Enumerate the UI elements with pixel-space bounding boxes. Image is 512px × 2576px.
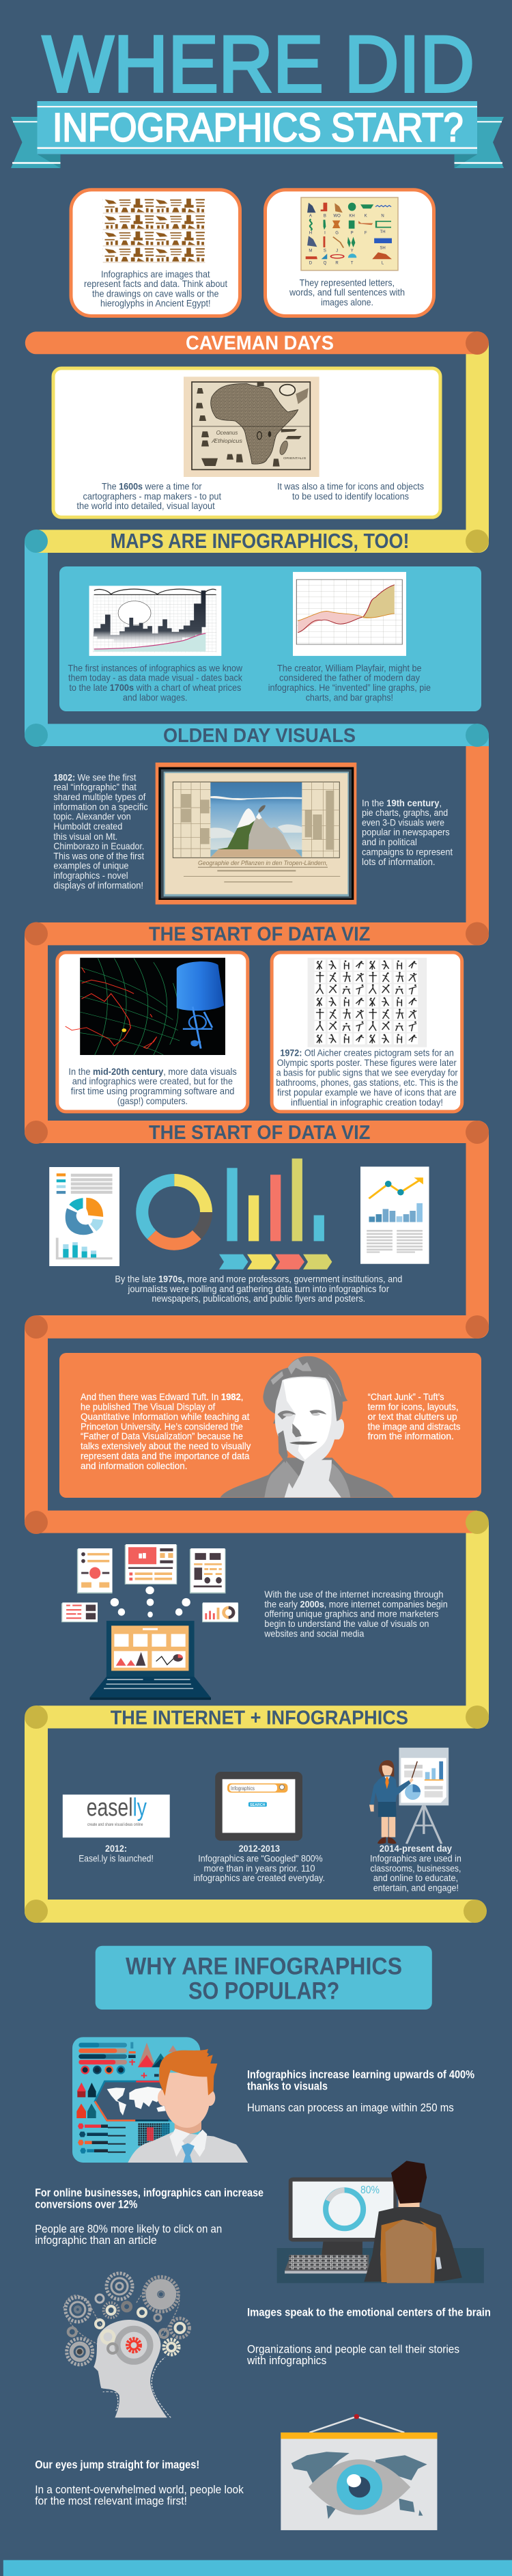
text: 2012 launch: Easel.ly is launched!: [79, 1853, 154, 1864]
text: 1802 humboldt: real “infographic” that: [53, 781, 137, 792]
image: alphabet chart: F: [365, 231, 367, 235]
text: 1972 olympic: 1972: Otl Aicher creates pictogram sets for an: [280, 1047, 454, 1058]
text: emotional centers: Organizations and people can tell their stories: [247, 2343, 459, 2355]
image: alphabet chart: P: [351, 231, 354, 235]
image: hieroglyph frieze: [103, 197, 205, 264]
image: alphabet chart: M: [309, 249, 312, 253]
text: 1802 humboldt: Chimborazo in Ecuador.: [53, 840, 144, 851]
title: where did: WHERE DID: [42, 19, 474, 109]
heading: the start of data viz: THE START OF DATA VIZ: [149, 924, 370, 946]
text: tuft biography: Princeton University. He’s considered the: [81, 1421, 243, 1431]
text: chart junk: term for icons, layouts,: [368, 1401, 459, 1412]
text: 1600s cartographers: The 1600s were a time for: [102, 481, 202, 492]
logo card: easelly: [63, 1794, 170, 1837]
icon: chevron arrows: [219, 1255, 332, 1270]
illustration: portrait of tufte: [221, 1356, 394, 1498]
chart: playfair trade balance: [293, 572, 406, 656]
text: eyes jump: In a content-overwhelmed world, people look: [35, 2484, 244, 2496]
text: 2012 launch: 2012:: [105, 1843, 127, 1854]
text: 2014-present: [370, 1843, 461, 1893]
image: computer graphic globe: [66, 958, 225, 1055]
text: tuft biography: talks extensively about the need to visually: [81, 1440, 251, 1451]
logo card: easelly: create and share visual ideas online: [87, 1822, 143, 1827]
text: tuft biography: he published The Visual Display of: [81, 1401, 215, 1412]
text: icons and objects: [277, 481, 424, 502]
text: 1802 humboldt: information on a specific: [53, 801, 148, 812]
image: alphabet chart: WO: [333, 214, 341, 218]
text: 1802 humboldt: topic. Alexander von: [53, 811, 131, 822]
heading: the start of data viz 2: THE START OF DATA VIZ: [149, 1122, 370, 1144]
text: first instances: and labor wages.: [123, 692, 187, 703]
image: map of africa: Æthiopicus: [211, 437, 243, 444]
image: alphabet chart: TH: [380, 230, 386, 234]
text: 2012 launch: [79, 1843, 154, 1864]
text: william playfair: [268, 663, 431, 703]
text: chart junk: “Chart Junk” - Tuft’s: [368, 1391, 444, 1402]
illustration: poster with eye and world map: [281, 2414, 437, 2530]
image: alphabet chart: [301, 197, 398, 271]
text: 1972 olympic: a basis for public signs that we see everyday for: [276, 1067, 458, 1078]
text: chart junk: or text that clutters up: [368, 1411, 457, 1422]
text: tuft biography: represent data and the importance of data: [81, 1451, 250, 1462]
text: first instances: to the late 1700s with a chart of wheat prices: [69, 682, 241, 693]
text: late 1970s: [115, 1274, 402, 1304]
text: late 1970s: newspapers, publications, and public flyers and posters.: [152, 1293, 365, 1304]
text: increase learning: thanks to visuals: [247, 2080, 328, 2092]
illustration: man at monitor with 80% chart: 80%: [360, 2184, 380, 2196]
illustration: presenter with easel: [369, 1748, 449, 1844]
document icon: line chart report: [360, 1166, 429, 1264]
icon: tablet with search: SEARCH: [250, 1803, 266, 1807]
text: online conversions: People are 80% more likely to click on an: [35, 2223, 222, 2235]
text: 1600s cartographers: the world into detailed, visual layout: [76, 500, 215, 511]
text: 2014-present: classrooms, businesses,: [370, 1863, 461, 1874]
footer bar: [3, 2560, 512, 2576]
text: emotional centers: [246, 2306, 491, 2367]
text: first instances: The first instances of infographics as we know: [68, 663, 243, 674]
text: tuft biography: Quantitative Information while teaching at: [81, 1411, 250, 1422]
image: olympic pictogram grid: [308, 958, 427, 1047]
heading: the internet + infographics: THE INTERNET + INFOGRAPHICS: [111, 1707, 408, 1729]
text: 19th century: lots of information.: [362, 856, 436, 867]
chart: donut ring: [142, 1180, 206, 1244]
text: early 2000s: offering unique graphics and more marketers: [264, 1608, 438, 1619]
text: 1972 olympic: Olympic sports poster. These figures were later: [277, 1057, 457, 1068]
text: 2012-2013: more than in years prior. 110: [203, 1863, 315, 1874]
panel: why are infographics so popular: WHY ARE INFOGRAPHICS: [126, 1953, 402, 1979]
text: mid-20th century: (gasp!) computers.: [117, 1095, 188, 1106]
text: card description: hieroglyphs in Ancient Egypt!: [100, 298, 210, 309]
text: chart junk: from the information.: [368, 1431, 454, 1442]
chart: colored bars: [227, 1159, 324, 1241]
image: alphabet chart: N: [381, 214, 384, 218]
image: alphabet chart: I: [324, 231, 326, 235]
text: card description: They represented letters,: [300, 277, 395, 288]
text: william playfair: charts, and bar graphs!: [306, 692, 393, 703]
image: alphabet chart: KH: [349, 214, 355, 218]
logo card: easelly: easelly: [87, 1794, 147, 1822]
icon: tablet with search: [215, 1772, 302, 1841]
illustration: laptop with floating documents: [61, 1544, 238, 1700]
text: early 2000s: With the use of the internet increasing through: [264, 1589, 444, 1600]
text: 19th century: campaigns to represent: [362, 847, 453, 858]
text: tuft biography: “Father of Data Visualization” because he: [81, 1431, 243, 1442]
card: otl aicher pictograms: [272, 953, 462, 1112]
text: 1972 olympic: influential in infographic creation today!: [291, 1097, 443, 1108]
text: late 1970s: By the late 1970s, more and more professors, government institutions, and: [115, 1274, 402, 1285]
image: alphabet chart: L: [382, 262, 384, 266]
text: tuft biography: and information collection.: [81, 1460, 187, 1471]
heading: caveman days: CAVEMAN DAYS: [186, 332, 334, 354]
text: increase learning: Infographics increase learning upwards of 400%: [247, 2069, 474, 2081]
text: eyes jump: Our eyes jump straight for images!: [35, 2459, 199, 2471]
image: humboldt chimborazo plate: [156, 763, 356, 905]
document icon: pie report: [49, 1167, 119, 1266]
text: 1802 humboldt: This was one of the first: [53, 850, 144, 861]
text: card description: [84, 269, 227, 309]
image: alphabet chart: Y: [351, 249, 354, 253]
illustration: man with infographic board: [72, 2037, 248, 2163]
text: card description: images alone.: [321, 297, 373, 307]
text: emotional centers: with infographics: [246, 2355, 326, 2367]
panel: maps and first charts: [59, 566, 481, 711]
text: mid-20th century: In the mid-20th century, more data visuals: [68, 1066, 237, 1077]
text: tuft biography: And then there was Edward Tuft. In 1982,: [81, 1391, 243, 1402]
image: alphabet chart: B: [324, 214, 326, 218]
text: early 2000s: websites and social media: [264, 1628, 364, 1639]
text: 1802 humboldt: 1802: We see the first: [53, 771, 136, 782]
text: 1802 humboldt: Humboldt created: [53, 821, 122, 832]
text: eyes jump: [35, 2459, 244, 2508]
text: icons and objects: It was also a time for icons and objects: [277, 481, 424, 492]
text: 1972 olympic: first popular example we have of icons that are: [277, 1086, 457, 1097]
text: emotional centers: Images speak to the emotional centers of the brain: [247, 2306, 491, 2318]
image: humboldt chimborazo plate: Geographie der Pflanzen in den Tropen-Ländern,: [198, 860, 328, 867]
text: 1802 humboldt: displays of information!: [53, 880, 143, 891]
image: alphabet chart: A: [309, 214, 312, 218]
connector ribbons and vertical tracks: [25, 331, 489, 1923]
panel: why are infographics so popular: SO POPULAR?: [188, 1977, 339, 2004]
illustration: man at monitor with 80% chart: [277, 2161, 484, 2283]
text: eyes jump: for the most relevant image first!: [35, 2495, 187, 2508]
image: alphabet chart: H: [309, 231, 312, 235]
text: card description: [289, 277, 405, 307]
text: tuft biography: [81, 1391, 251, 1471]
illustration: head with gears: [63, 2273, 190, 2417]
text: increase learning: [247, 2069, 474, 2114]
text: 2012-2013: [194, 1843, 325, 1883]
text: card description: words, and full sentences with: [289, 287, 405, 298]
text: early 2000s: begin to understand the value of visuals on: [264, 1618, 429, 1629]
image: alphabet chart: D: [309, 262, 313, 266]
text: first instances: [68, 663, 243, 703]
text: 1972 olympic: bathrooms, phones, gas stations, etc. This is the: [276, 1077, 458, 1088]
text: 1972 olympic: [276, 1047, 458, 1108]
image: map of africa: Oceanus: [216, 429, 238, 436]
image: alphabet chart: T: [351, 262, 354, 266]
text: 19th century: even 3-D visuals were: [362, 817, 444, 828]
text: 2012-2013: Infographics are “Googled” 800%: [198, 1853, 323, 1864]
image: alphabet chart: K: [365, 214, 367, 218]
text: 2012-2013: 2012-2013: [239, 1843, 280, 1854]
text: william playfair: The creator, William Playfair, might be: [277, 663, 422, 674]
text: mid-20th century: and infographics were created, but for the: [72, 1075, 233, 1086]
card: mid-20th century: [57, 953, 248, 1112]
text: 19th century: [362, 797, 453, 867]
text: 2012-2013: infographics are created everyday.: [194, 1872, 325, 1883]
title banner ribbon: [11, 101, 504, 168]
text: 1802 humboldt: infographics - novel: [53, 870, 128, 881]
image: alphabet chart: G: [335, 231, 339, 235]
text: 19th century: In the 19th century,: [362, 797, 442, 808]
image: alphabet chart: S: [324, 249, 326, 253]
image: alphabet chart: J: [336, 249, 338, 253]
icon: tablet with search: Infographics: [231, 1785, 255, 1792]
image: alphabet chart: Q: [324, 262, 327, 266]
text: late 1970s: journalists were polling and gathering data turn into infographics for: [128, 1283, 389, 1294]
text: 19th century: and in political: [362, 836, 417, 847]
image: alphabet chart: SH: [380, 246, 386, 250]
text: 19th century: popular in newspapers: [362, 827, 450, 838]
panel: edward tufte: [59, 1353, 481, 1498]
text: online conversions: For online businesses, infographics can increase: [35, 2187, 264, 2199]
image: map of africa: [184, 376, 319, 477]
panel: why are infographics so popular: [96, 1946, 432, 2010]
text: first instances: them today - as data made visual - dates back: [68, 672, 243, 683]
text: 2014-present: entertain, and engage!: [373, 1882, 459, 1893]
text: increase learning: Humans can process an image within 250 ms: [247, 2102, 454, 2114]
text: card description: Infographics are images that: [101, 269, 210, 279]
chart: wheat prices and wages: [89, 586, 221, 656]
text: early 2000s: [264, 1589, 448, 1639]
heading: maps are infographics, too: MAPS ARE INFOGRAPHICS, TOO!: [111, 529, 409, 553]
text: 1802 humboldt: examples of unique: [53, 860, 129, 871]
image: alphabet chart: R: [335, 262, 339, 266]
text: chart junk: [368, 1391, 460, 1442]
text: 2014-present: 2014-present day: [380, 1843, 452, 1854]
text: card description: the drawings on cave walls or the: [92, 288, 219, 299]
text: 19th century: pie charts, graphs, and: [362, 807, 448, 818]
text: 1802 humboldt: shared multiple types of: [53, 791, 145, 802]
image: map of africa: ORIENTALIS: [283, 456, 307, 461]
card: hieroglyphs: [71, 190, 240, 316]
text: online conversions: [35, 2187, 264, 2247]
text: online conversions: conversions over 12%: [35, 2198, 138, 2210]
text: 2014-present: and online to educate,: [373, 1872, 458, 1883]
text: card description: represent facts and data. Think about: [84, 278, 227, 289]
text: 1802 humboldt: this visual on Mt.: [53, 831, 117, 842]
text: 1600s cartographers: [76, 481, 221, 511]
text: early 2000s: the early 2000s, more internet companies begin: [264, 1599, 448, 1610]
text: icons and objects: to be used to identify locations: [292, 491, 409, 502]
text: mid-20th century: first time using programming software and: [71, 1085, 234, 1096]
text: william playfair: considered the father of modern day: [279, 672, 420, 683]
text: 1802 humboldt: [53, 771, 148, 891]
card: egyptian alphabet: [265, 190, 434, 316]
title banner ribbon: INFOGRAPHICS START?: [53, 105, 463, 150]
text: chart junk: the image and distracts: [368, 1421, 460, 1431]
text: 1600s cartographers: cartographers - map makers - to put: [83, 491, 221, 502]
heading: olden day visuals: OLDEN DAY VISUALS: [163, 725, 356, 747]
text: mid-20th century: [68, 1066, 237, 1106]
text: william playfair: infographics. He “invented” line graphs, pie: [268, 682, 431, 693]
text: online conversions: infographic than an article: [35, 2234, 157, 2247]
panel: caveman days: [53, 368, 440, 517]
text: 2014-present: Infographics are used in: [370, 1853, 461, 1864]
